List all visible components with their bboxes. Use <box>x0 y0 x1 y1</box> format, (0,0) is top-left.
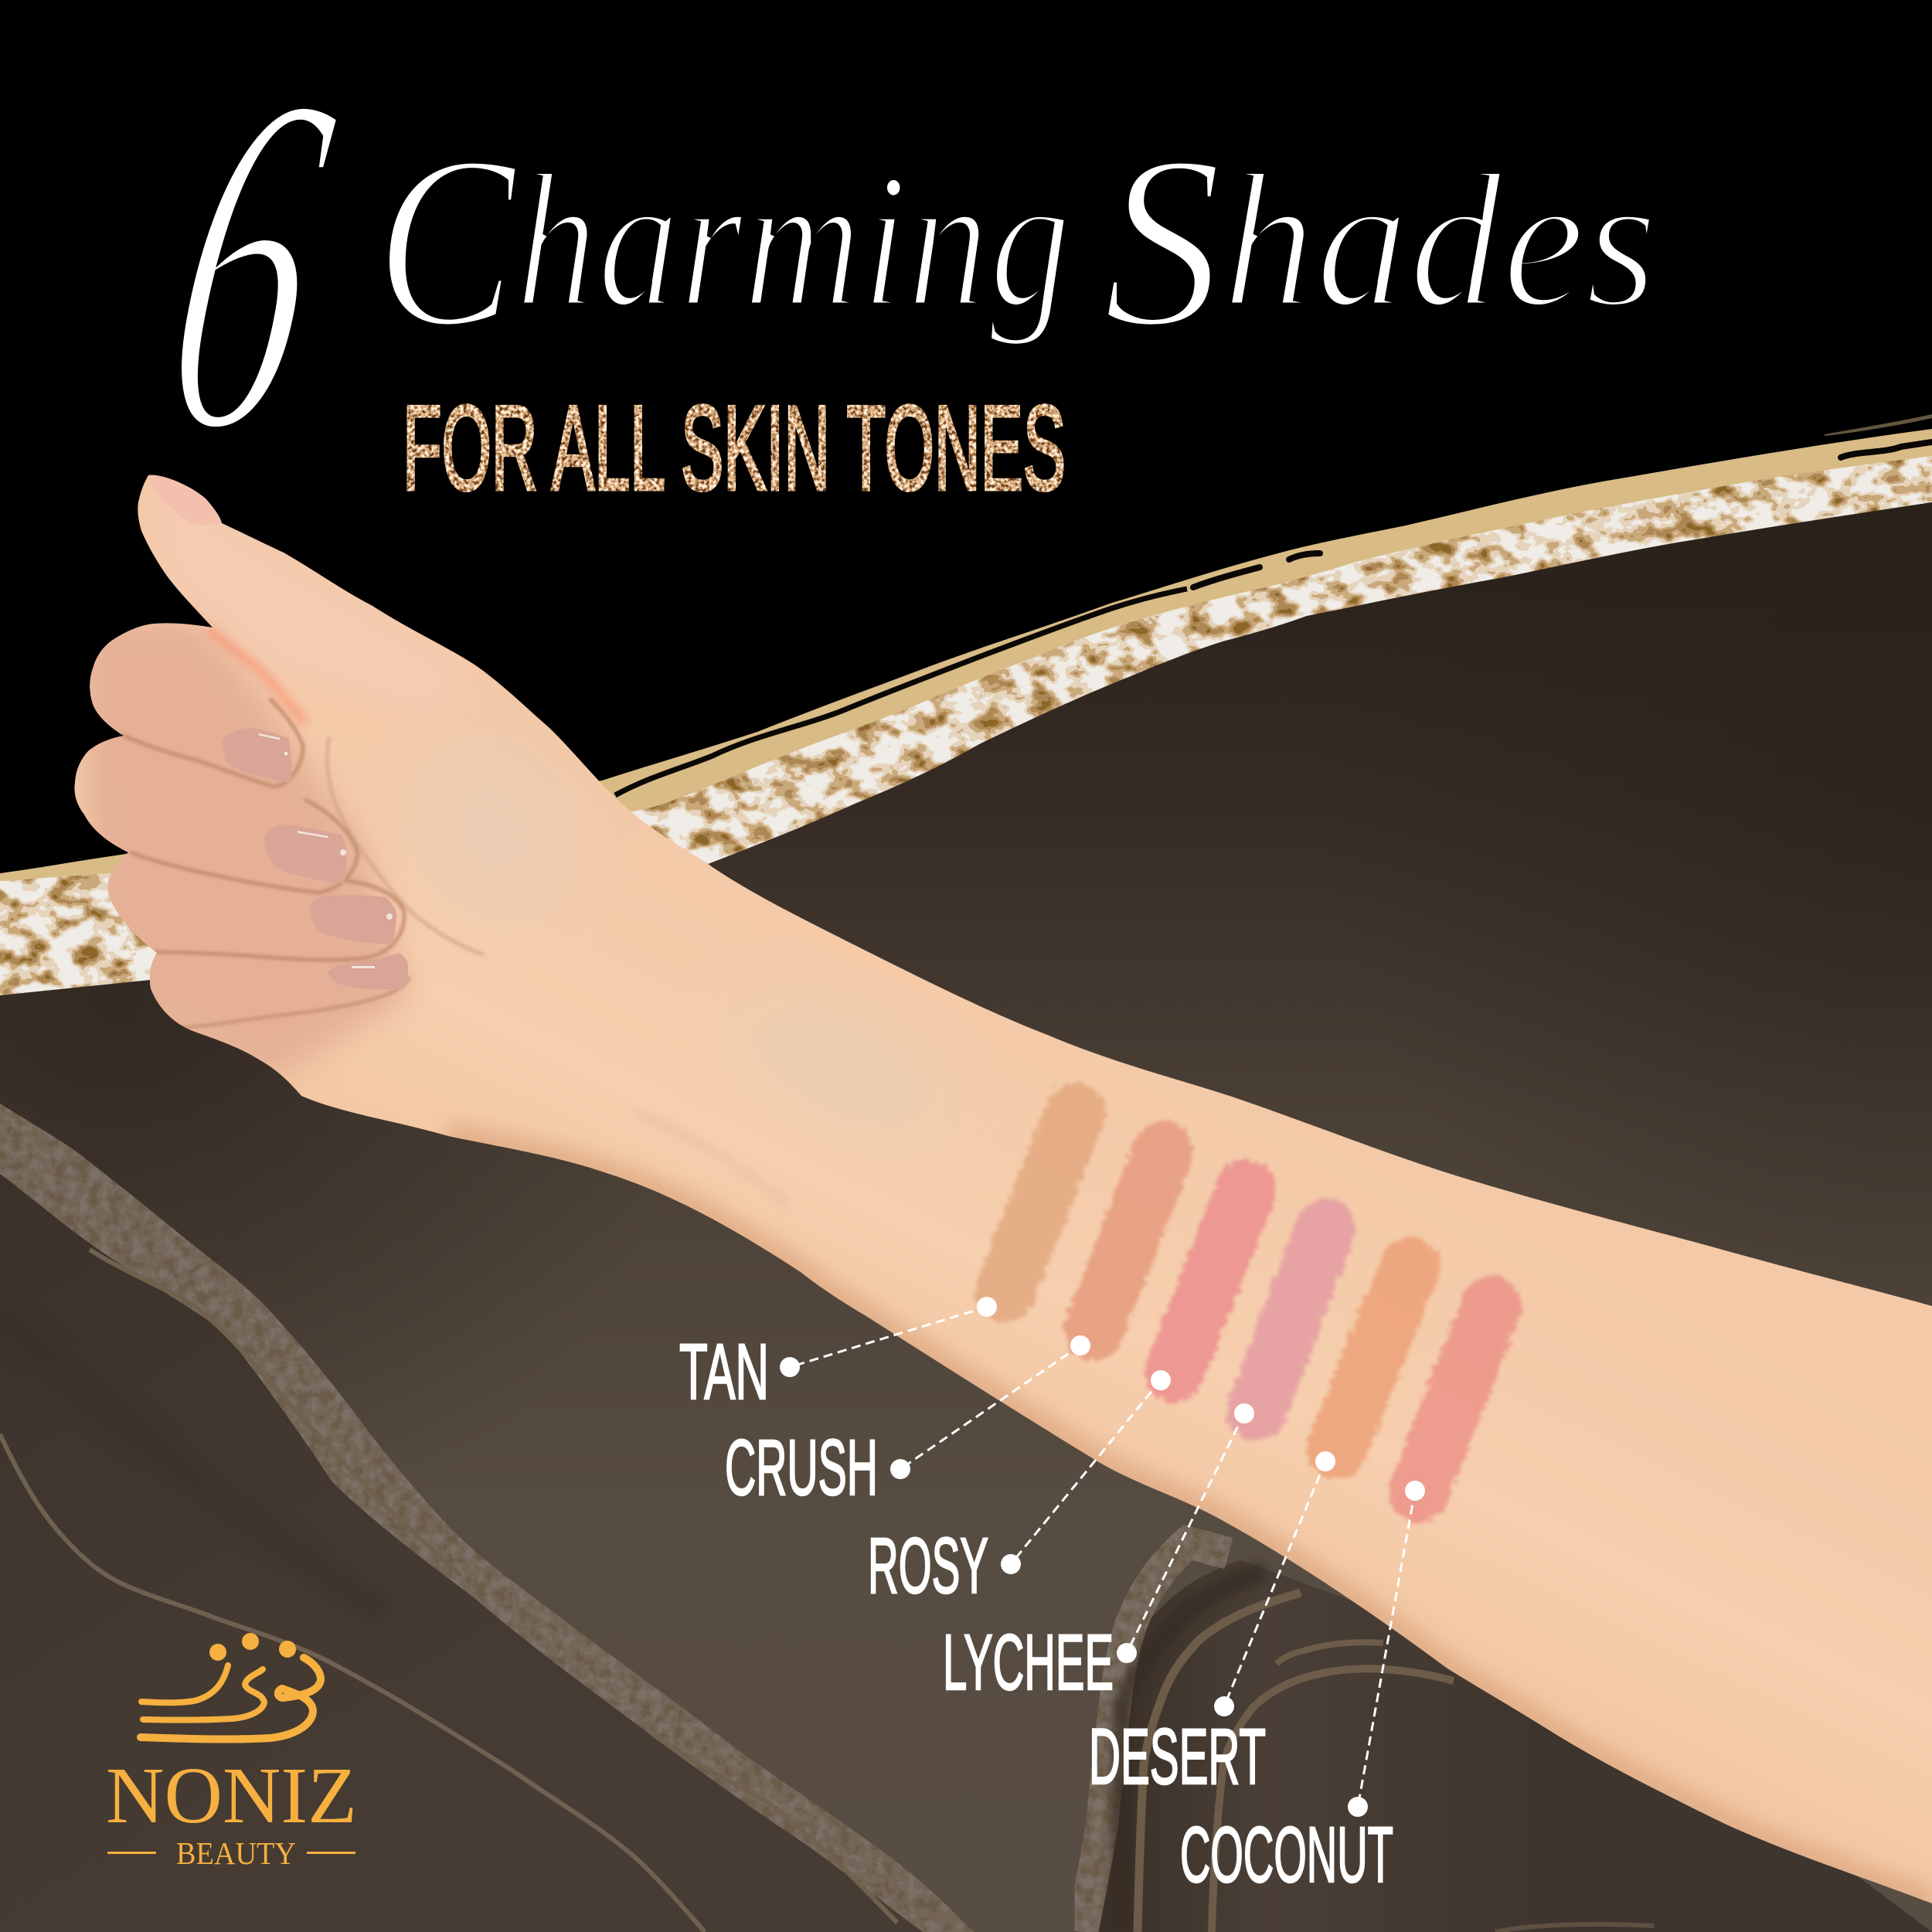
thin black slit in gold band <box>615 589 1187 795</box>
subtitle: for all skin tones: FOR ALL SKIN TONES <box>403 381 1066 515</box>
brown background panel <box>0 502 1932 1932</box>
marble swirl: lower left <box>0 1104 974 1932</box>
label: LYCHEE <box>943 1403 1254 1706</box>
marble band <box>0 456 1932 1082</box>
logo: Noniz Beauty: NONIZ <box>106 1751 357 1840</box>
label: DESERT: DESERT <box>1089 1713 1266 1801</box>
label: DESERT <box>1089 1451 1335 1801</box>
title: Charming Shades: harming <box>515 134 1071 348</box>
title: Charming Shades: hades <box>1223 134 1658 348</box>
finger nails <box>222 728 408 989</box>
arm and hand <box>0 464 1932 1932</box>
label: TAN: TAN <box>679 1328 769 1416</box>
label: CRUSH <box>725 1335 1090 1512</box>
marble swirl: lower right <box>1082 1543 1932 1932</box>
logo: Noniz Beauty: BEAUTY <box>176 1835 296 1871</box>
title: Charming Shades: C <box>376 105 520 379</box>
gold wisp <box>1825 414 1932 436</box>
label: COCONUT <box>1180 1481 1425 1899</box>
icon: logo calligraphy mark <box>141 1633 321 1740</box>
gold wave band <box>0 414 1932 1082</box>
skin shading <box>77 479 1932 1903</box>
label: TAN <box>679 1297 997 1416</box>
thumb nail <box>148 475 222 525</box>
label: ROSY <box>868 1370 1171 1610</box>
lipstick swatches <box>1005 1113 1492 1492</box>
label: ROSY: ROSY <box>868 1522 988 1610</box>
title: numeral 6: 6 <box>136 0 362 532</box>
label: COCONUT: COCONUT <box>1180 1811 1393 1899</box>
label: LYCHEE: LYCHEE <box>943 1618 1114 1706</box>
nail highlights <box>258 733 393 968</box>
finger creases <box>124 699 483 1028</box>
title: Charming Shades <box>376 105 1658 379</box>
title: Charming Shades: S <box>1103 105 1223 379</box>
label: CRUSH: CRUSH <box>725 1423 878 1512</box>
logo: Noniz Beauty <box>106 1633 357 1871</box>
